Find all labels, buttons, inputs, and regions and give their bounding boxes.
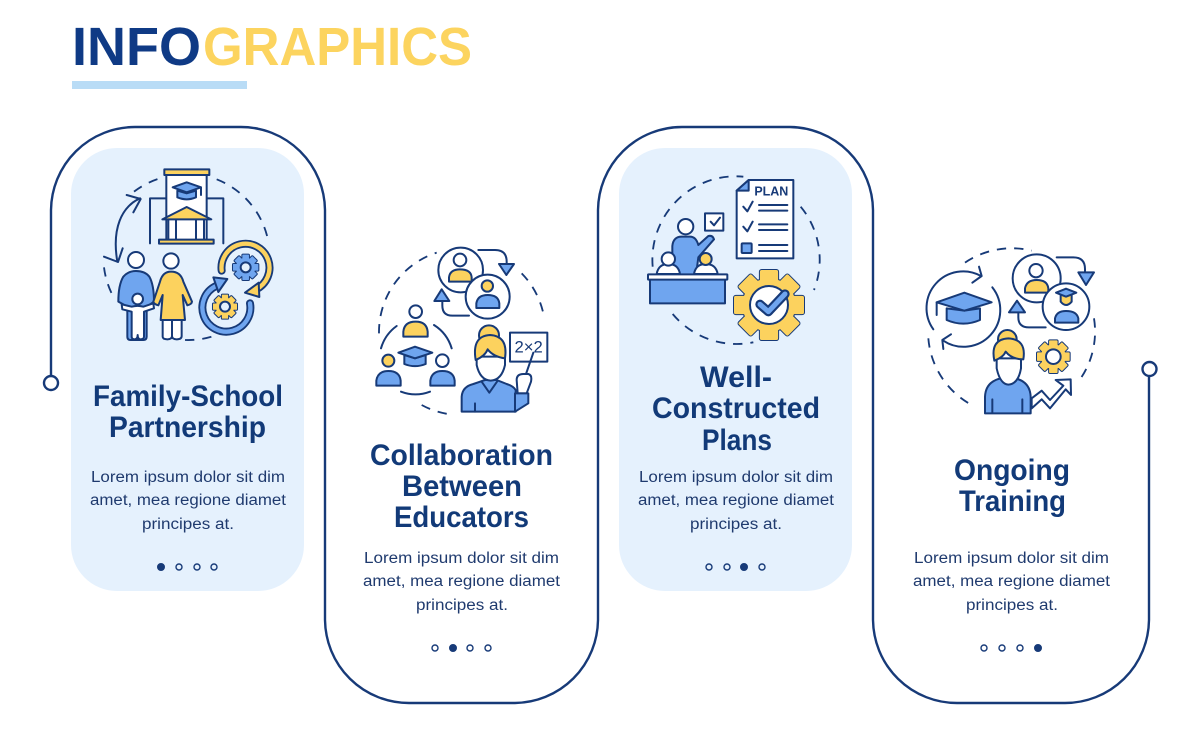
heading: collaboration between educators: Collaboration	[370, 439, 553, 472]
text: card 3 body	[638, 469, 835, 533]
text: card 2 body: principes at.	[416, 597, 508, 614]
text: card 4 body: Lorem ipsum dolor sit dim	[914, 550, 1109, 567]
heading: collaboration between educators: Educators	[394, 501, 529, 534]
heading: ongoing training: Training	[959, 485, 1066, 518]
heading: well-constructed plans	[652, 361, 820, 457]
title underline	[72, 81, 247, 89]
pagination: card 3	[706, 564, 765, 570]
text: card 1 body	[90, 469, 287, 533]
title: INFO	[72, 17, 201, 77]
heading: well-constructed plans: Constructed	[652, 392, 820, 425]
heading: family-school partnership	[93, 380, 283, 444]
text: card 2 body: Lorem ipsum dolor sit dim	[364, 550, 559, 567]
heading: collaboration between educators: Between	[402, 470, 522, 503]
icon: ongoing training	[927, 248, 1095, 413]
heading: well-constructed plans: Well-	[700, 361, 772, 394]
heading: collaboration between educators	[370, 439, 553, 534]
text: card 4 body: principes at.	[966, 597, 1058, 614]
text: card 4 body	[913, 550, 1111, 614]
title	[72, 17, 472, 77]
connecting outline	[44, 127, 1156, 703]
text: card 2 body: amet, mea regione diamet	[363, 573, 561, 590]
icon: well-constructed plans: PLAN	[754, 184, 788, 198]
text: card 3 body: principes at.	[690, 516, 782, 533]
text: card 1 body: principes at.	[142, 516, 234, 533]
icon: well-constructed plans	[648, 176, 820, 344]
heading: family-school partnership: Partnership	[109, 411, 266, 444]
text: card 1 body: Lorem ipsum dolor sit dim	[91, 469, 285, 486]
pagination: card 2	[432, 645, 491, 651]
title: GRAPHICS	[203, 17, 472, 77]
text: card 1 body: amet, mea regione diamet	[90, 492, 287, 509]
text: card 3 body: amet, mea regione diamet	[638, 492, 835, 509]
pagination: card 1	[158, 564, 217, 570]
text: card 2 body	[363, 550, 561, 614]
icon: collaboration between educators: 2×2	[515, 337, 543, 356]
pagination: card 4	[981, 645, 1041, 651]
heading: family-school partnership: Family-School	[93, 380, 283, 413]
heading: ongoing training	[954, 454, 1070, 518]
icon: family and school	[104, 169, 269, 340]
text: card 3 body: Lorem ipsum dolor sit dim	[639, 469, 833, 486]
heading: ongoing training: Ongoing	[954, 454, 1070, 487]
text: card 4 body: amet, mea regione diamet	[913, 573, 1111, 590]
panel backgrounds	[71, 148, 852, 591]
heading: well-constructed plans: Plans	[702, 424, 772, 457]
icon: collaboration between educators	[376, 248, 547, 414]
